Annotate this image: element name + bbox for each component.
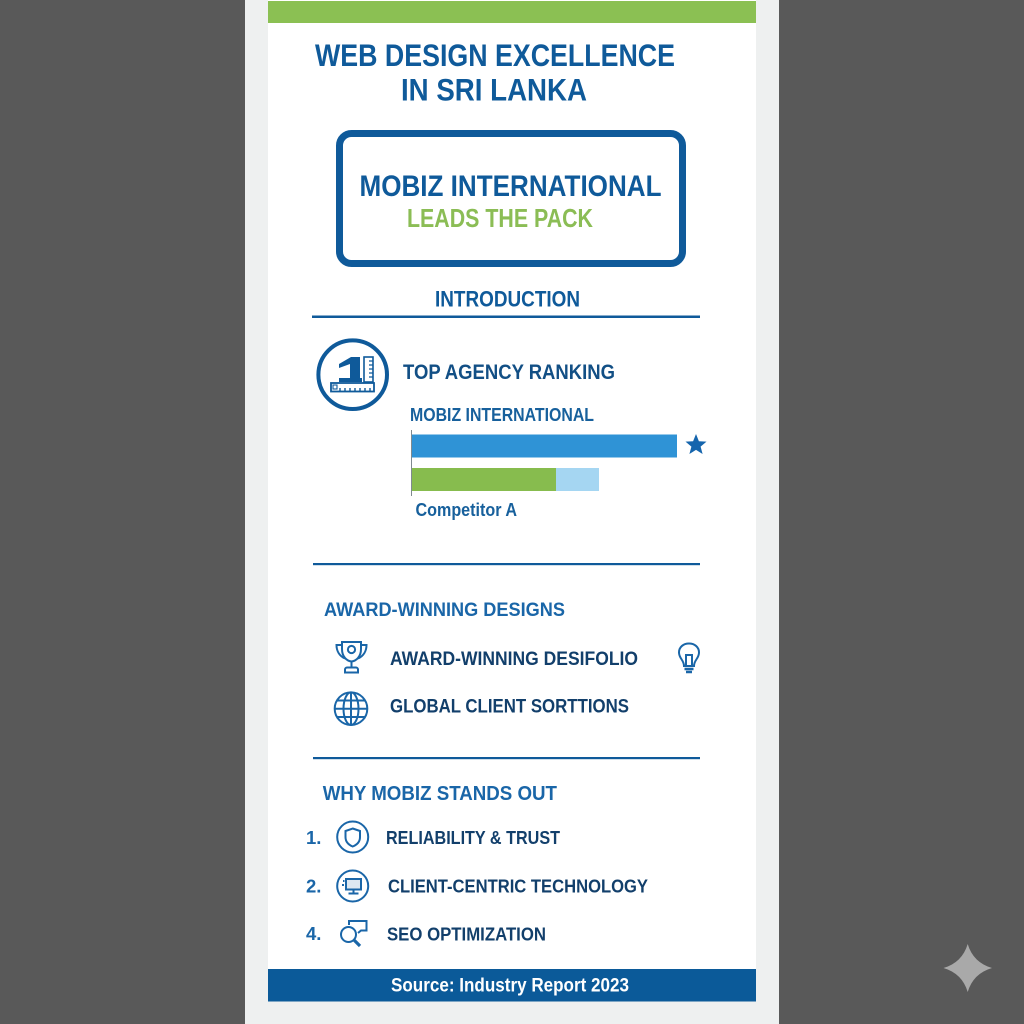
title xyxy=(315,37,675,108)
title: WEB DESIGN EXCELLENCE xyxy=(315,37,675,73)
list item: global client sorttions: GLOBAL CLIENT SORTTIONS xyxy=(390,696,629,718)
list item: award-winning desifolio: AWARD-WINNING DESIFOLIO xyxy=(390,649,638,670)
number 4: 4. xyxy=(306,923,321,944)
heading: top agency ranking: TOP AGENCY RANKING xyxy=(403,360,615,384)
headline: company name: MOBIZ INTERNATIONAL xyxy=(360,170,662,203)
panel: top agency ranking xyxy=(318,340,706,520)
icon: magnifier with speech bubble xyxy=(341,921,366,946)
heading: why Mobiz stands out: WHY MOBIZ STANDS OUT xyxy=(323,782,557,805)
list item: SEO optimization: SEO OPTIMIZATION xyxy=(387,924,546,944)
icon: monitor xyxy=(337,870,368,902)
list item: client-centric technology: CLIENT-CENTRIC TECHNOLOGY xyxy=(388,876,648,896)
top green band xyxy=(268,1,756,23)
number 2: 2. xyxy=(306,876,321,896)
panel: headline box xyxy=(340,134,682,264)
footer source text: Source: Industry Report 2023 xyxy=(391,976,629,996)
icon: shield xyxy=(337,822,368,852)
bar label: Competitor A: Competitor A xyxy=(416,500,517,520)
bar chart xyxy=(411,430,677,496)
icon: globe xyxy=(335,692,367,725)
headline: tagline: LEADS THE PACK xyxy=(407,205,593,233)
icon: sparkle watermark xyxy=(944,944,992,992)
icon: light bulb xyxy=(679,644,699,672)
icon: star xyxy=(686,434,706,454)
footer band xyxy=(268,969,756,1002)
icon: number one with rulers xyxy=(318,340,387,409)
title: IN SRI LANKA xyxy=(401,72,587,108)
icon: trophy xyxy=(336,642,366,672)
list item: reliability and trust: RELIABILITY & TRUST xyxy=(386,828,560,848)
heading: award-winning designs: AWARD-WINNING DESIGNS xyxy=(324,599,565,621)
heading: introduction: INTRODUCTION xyxy=(435,286,580,312)
number 1: 1. xyxy=(306,827,321,848)
panel: why Mobiz stands out xyxy=(306,782,648,946)
bar label: Mobiz International: MOBIZ INTERNATIONAL xyxy=(410,404,594,425)
panel: award-winning designs xyxy=(324,599,699,725)
